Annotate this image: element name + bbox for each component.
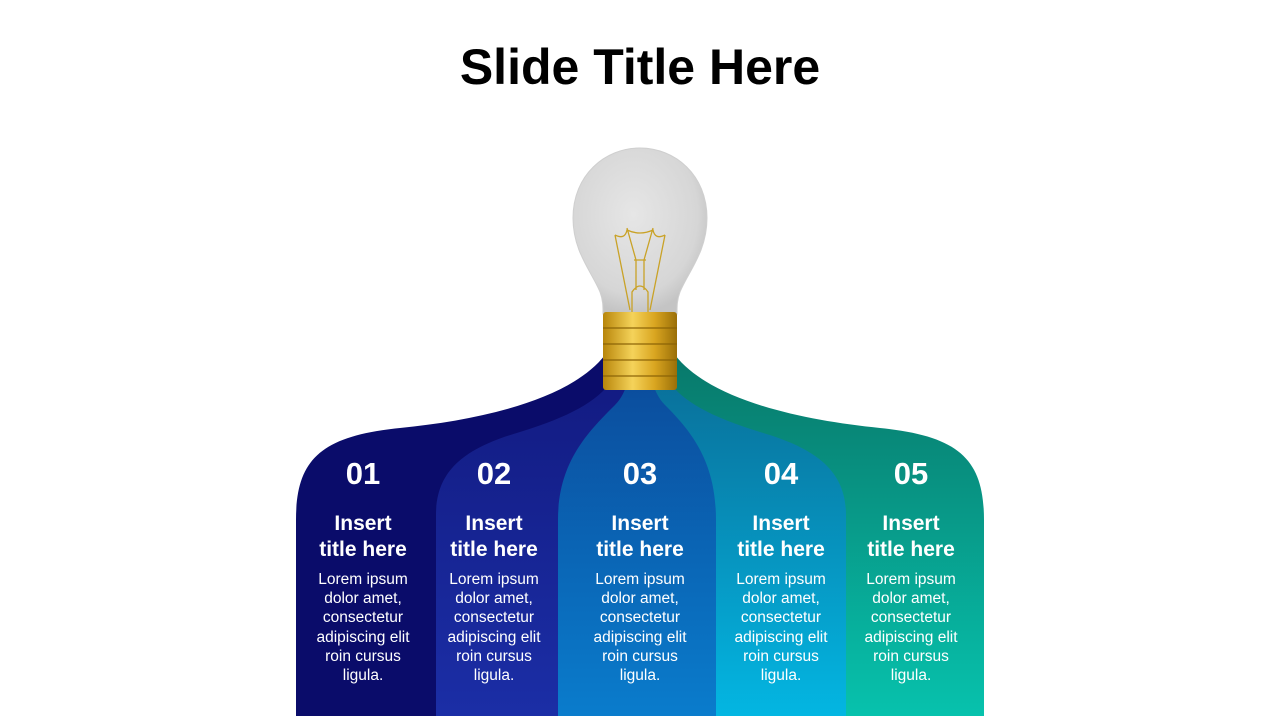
column 03: consectetur: [600, 609, 680, 626]
column 03: title here: [596, 538, 684, 561]
column 02: consectetur: [454, 609, 534, 626]
column 01: consectetur: [323, 609, 403, 626]
column 03: Insert: [611, 512, 669, 535]
column 02: [447, 456, 541, 684]
column 01: dolor amet,: [324, 590, 402, 607]
column 05: Lorem ipsum: [866, 571, 956, 588]
column 02: Lorem ipsum: [449, 571, 539, 588]
ribbon 2: [436, 360, 640, 716]
column 03: Lorem ipsum: [595, 571, 685, 588]
column 05: dolor amet,: [872, 590, 950, 607]
column 03: adipiscing elit: [593, 629, 687, 646]
column 05: consectetur: [871, 609, 951, 626]
ribbon 3: [558, 360, 716, 716]
column 02: Insert: [465, 512, 523, 535]
column 03: roin cursus: [602, 648, 678, 665]
column 01: adipiscing elit: [316, 629, 410, 646]
column 02: title here: [450, 538, 538, 561]
column 04: 04: [764, 456, 798, 491]
column 02: dolor amet,: [455, 590, 533, 607]
column 05: ligula.: [891, 667, 931, 684]
column 04: ligula.: [761, 667, 801, 684]
column 02: 02: [477, 456, 511, 491]
column 04: adipiscing elit: [734, 629, 828, 646]
column 01: Lorem ipsum: [318, 571, 408, 588]
column 04: roin cursus: [743, 648, 819, 665]
column 04: Lorem ipsum: [736, 571, 826, 588]
column 01: [316, 456, 410, 684]
column 02: adipiscing elit: [447, 629, 541, 646]
column 04: title here: [737, 538, 825, 561]
column 04: dolor amet,: [742, 590, 820, 607]
column 02: roin cursus: [456, 648, 532, 665]
column 05: adipiscing elit: [864, 629, 958, 646]
column 01: 01: [346, 456, 380, 491]
column 03: [593, 456, 687, 684]
ribbon 5: [640, 355, 984, 716]
column 05: roin cursus: [873, 648, 949, 665]
column 01: ligula.: [343, 667, 383, 684]
ribbon 4: [640, 360, 846, 716]
icon: light bulb: [573, 148, 707, 390]
title: Slide Title Here: [460, 39, 820, 95]
column 02: ligula.: [474, 667, 514, 684]
column 04: [734, 456, 828, 684]
column 04: Insert: [752, 512, 810, 535]
column 05: title here: [867, 538, 955, 561]
column 01: roin cursus: [325, 648, 401, 665]
column 03: 03: [623, 456, 657, 491]
column 03: dolor amet,: [601, 590, 679, 607]
column 03: ligula.: [620, 667, 660, 684]
ribbon 1: [296, 355, 640, 716]
column 01: title here: [319, 538, 407, 561]
column 05: 05: [894, 456, 928, 491]
column 05: [864, 456, 958, 684]
column 01: Insert: [334, 512, 392, 535]
column 05: Insert: [882, 512, 940, 535]
column 04: consectetur: [741, 609, 821, 626]
